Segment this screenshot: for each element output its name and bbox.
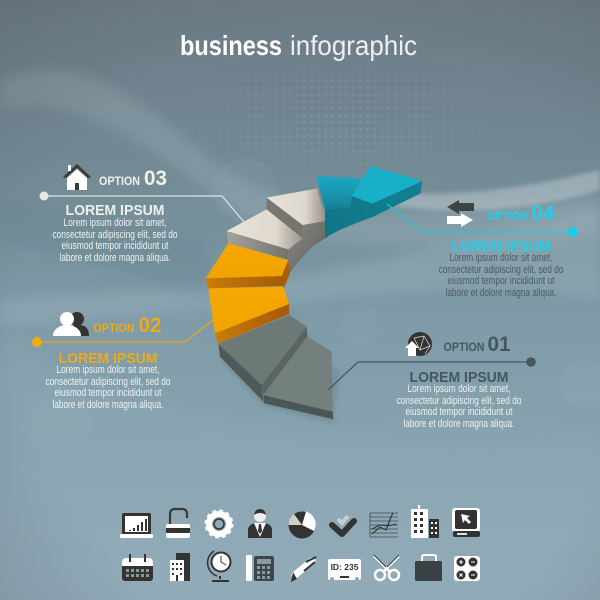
step: white upper: [267, 188, 325, 273]
connector lines: [32, 192, 578, 390]
icon: scissors: [374, 555, 399, 580]
step: white lower: [227, 209, 303, 260]
icon: gear: [206, 512, 232, 536]
body text: consectetur adipiscing elit, sed do: [52, 229, 178, 241]
icon: pie chart: [288, 512, 316, 538]
option label: OPTION: [94, 323, 134, 335]
body text: Lorem ipsum dolor sit amet,: [450, 252, 552, 264]
icon: arrows: [447, 200, 474, 227]
icon: globe network: [405, 332, 432, 356]
icon: globe clock: [208, 551, 230, 581]
body text: eiusmod tempor incididunt ut: [54, 387, 162, 399]
icon: pen: [291, 557, 316, 582]
icon: house: [63, 164, 91, 190]
step: orange lower: [208, 287, 289, 344]
body text: consectetur adipiscing elit, sed do: [46, 376, 170, 388]
icon: office buildings: [411, 505, 439, 538]
step: orange upper: [206, 243, 290, 289]
option label: [99, 167, 167, 190]
icon: line chart: [370, 513, 398, 537]
body text: eiusmod tempor incididunt ut: [62, 240, 168, 252]
body text: [52, 217, 178, 264]
icon: open lock: [166, 509, 190, 538]
heading: LOREM IPSUM: [58, 350, 158, 367]
heading: LOREM IPSUM: [66, 202, 164, 219]
icon: businessman: [248, 509, 272, 538]
heading: LOREM IPSUM: [410, 369, 508, 386]
option label: OPTION: [486, 211, 528, 223]
title: business: [180, 30, 282, 61]
panel: option 03: [52, 164, 178, 264]
icon: ID card: [328, 559, 361, 581]
icon: monitor cursor: [452, 508, 480, 537]
body text: [438, 252, 564, 299]
step: gray lower: [263, 337, 333, 419]
title: infographic: [290, 30, 417, 61]
spiral staircase: [206, 166, 422, 423]
icon row 2: [122, 551, 480, 582]
icon: people: [53, 312, 89, 336]
icon: math symbols: [454, 556, 480, 581]
body text: eiusmod tempor incididunt ut: [406, 406, 512, 418]
body text: consectetur adipiscing elit, sed do: [396, 395, 522, 407]
step: teal upper: [317, 166, 422, 238]
step: gray upper: [218, 315, 307, 402]
icon: ID card: ID: 235: [331, 562, 359, 572]
body text: consectetur adipiscing elit, sed do: [438, 264, 564, 276]
icon: check mark: [332, 516, 354, 534]
option label: 01: [488, 333, 511, 356]
option label: 04: [532, 202, 555, 225]
option label: 02: [138, 314, 162, 337]
staircase shadow: [220, 333, 340, 423]
panel: option 02: [46, 312, 170, 411]
panel: option 04: [438, 200, 564, 299]
icon: calendar: [122, 554, 153, 581]
title: [180, 30, 417, 61]
body text: [396, 383, 522, 430]
icon: apartment building: [170, 553, 190, 581]
body text: Lorem ipsum dolor sit amet,: [56, 364, 160, 376]
body text: labore et dolore magna aliqua.: [446, 287, 556, 299]
option label: [444, 333, 511, 356]
body text: labore et dolore magna aliqua.: [60, 252, 170, 264]
icon row 1: [120, 505, 480, 538]
option label: OPTION: [99, 176, 140, 188]
icon: calculator: [246, 555, 274, 581]
body text: Lorem ipsum dolor sit amet,: [408, 383, 510, 395]
option label: OPTION: [444, 342, 484, 354]
icon: laptop chart: [120, 513, 153, 538]
body text: [46, 364, 170, 411]
heading: LOREM IPSUM: [452, 238, 550, 255]
option label: [94, 314, 162, 337]
body text: labore et dolore magna aliqua.: [404, 418, 514, 430]
panel: option 01: [396, 332, 522, 430]
body text: Lorem ipsum dolor sit amet,: [64, 217, 166, 229]
body text: eiusmod tempor incididunt ut: [448, 275, 554, 287]
icon: briefcase: [415, 555, 442, 581]
body text: labore et dolore magna aliqua.: [52, 399, 164, 411]
option label: 03: [144, 167, 167, 190]
option label: [486, 202, 555, 225]
